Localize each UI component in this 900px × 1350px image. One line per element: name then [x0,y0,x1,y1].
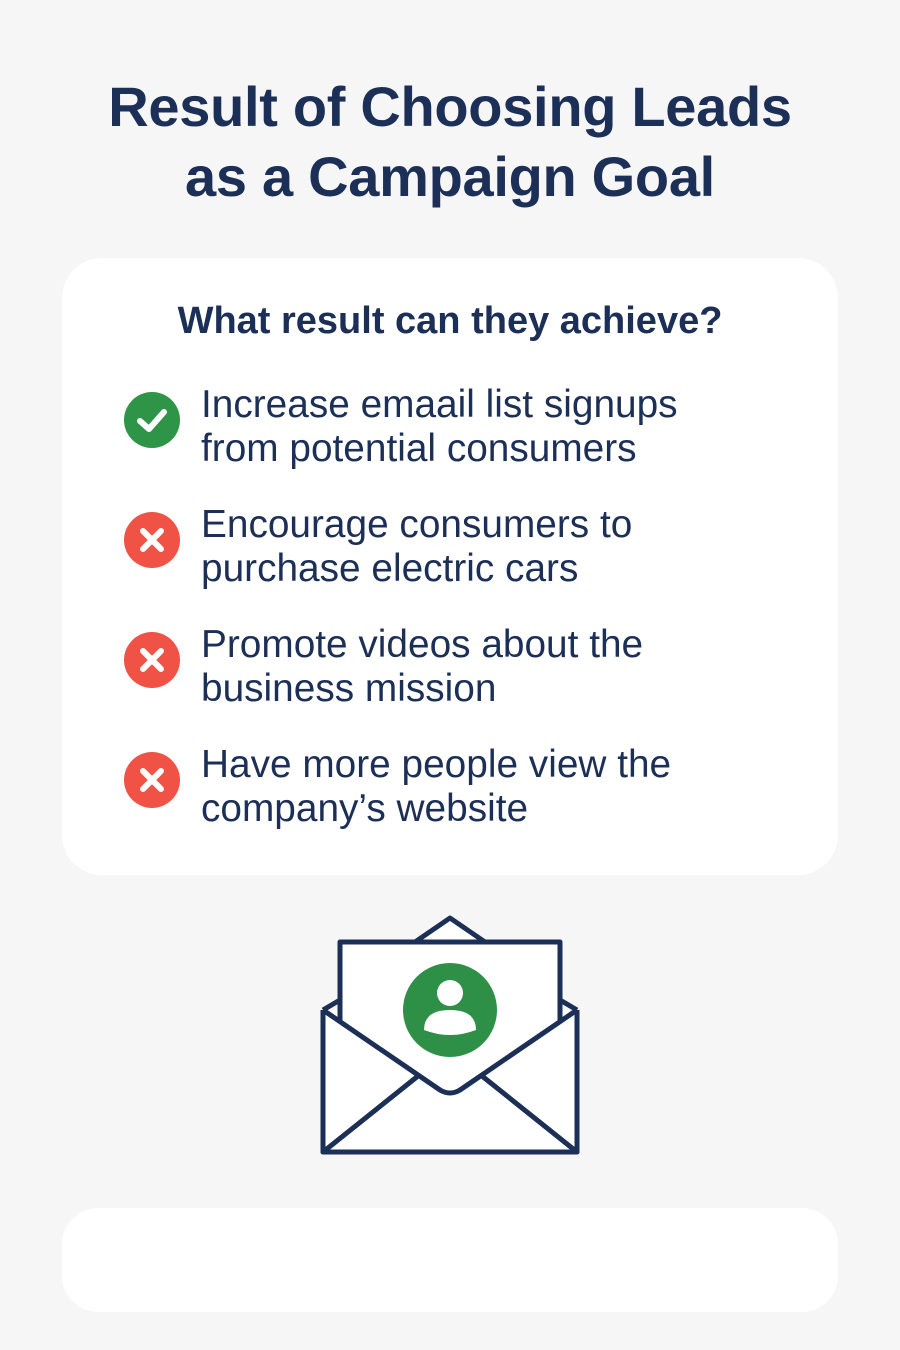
item: videos (cross) [124,623,643,710]
item: email signups (check) [124,383,678,470]
item: electric cars (cross) [124,503,632,590]
icon: envelope with contact [320,916,580,1154]
title: as a Campaign Goal [185,145,715,208]
icon: green check [124,392,180,448]
item: videos (cross): Promote videos about the [201,623,643,666]
title: Result of Choosing Leads [108,75,792,138]
title [108,75,792,208]
item: electric cars (cross): purchase electric cars [201,547,578,590]
item: electric cars (cross): Encourage consumers to [201,503,632,546]
item: videos (cross): business mission [201,667,496,710]
subtitle: What result can they achieve? [178,300,722,342]
item: email signups (check): Increase emaail list signups [201,383,678,426]
icon: red cross [124,512,180,568]
item: website views (cross) [124,743,671,830]
item: website views (cross): company’s website [201,787,528,830]
item: website views (cross): Have more people view the [201,743,671,786]
icon: red cross [124,632,180,688]
icon: red cross [124,752,180,808]
panel: results card [62,258,838,875]
item: email signups (check): from potential consumers [201,427,637,470]
panel: bottom empty card [62,1208,838,1312]
